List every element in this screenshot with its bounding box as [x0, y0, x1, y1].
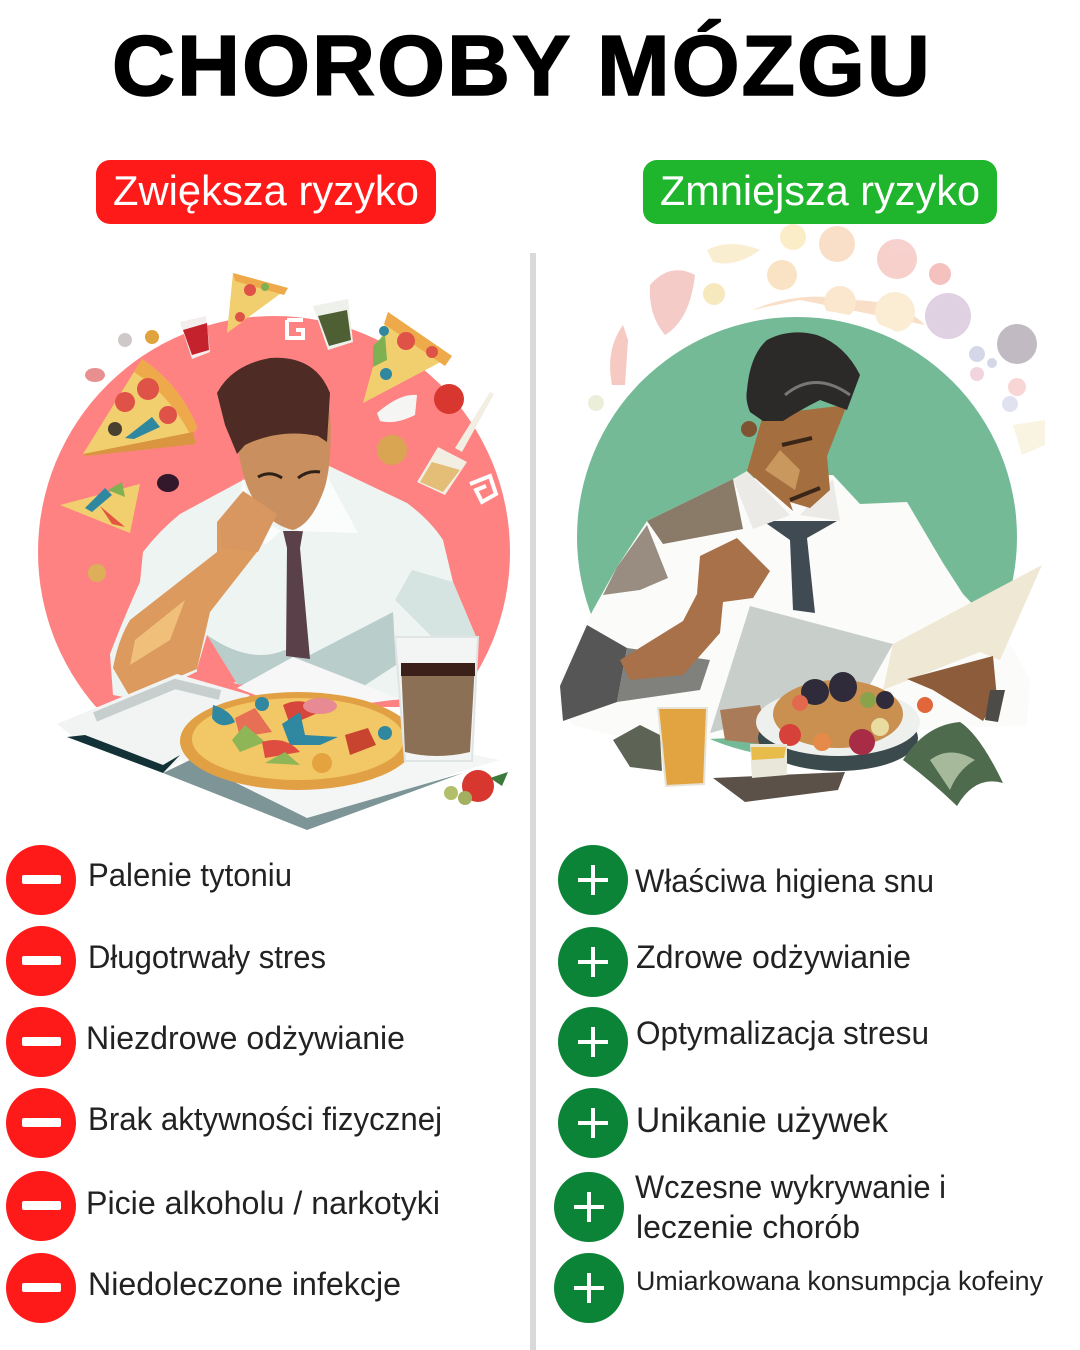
salad bowl — [756, 672, 933, 771]
tomatoes — [444, 770, 508, 805]
risk item: alcohol and drugs — [6, 1171, 440, 1241]
head — [234, 410, 331, 530]
protective item: early detection: Wczesne wykrywanie i — [635, 1169, 946, 1205]
glass of juice — [658, 708, 707, 786]
back paper — [237, 657, 400, 712]
collar — [240, 468, 358, 545]
floating pizza slices — [60, 273, 452, 533]
open book — [57, 674, 250, 773]
tie — [283, 531, 310, 659]
risk list — [6, 845, 442, 1323]
collar — [733, 471, 840, 529]
drinks and snacks — [85, 299, 496, 582]
neck and face — [747, 405, 847, 511]
book right page — [883, 565, 1042, 690]
risk item: no physical activity: Brak aktywności fizycznej — [88, 1101, 442, 1137]
protective item: moderate caffeine — [554, 1253, 1043, 1323]
protective item: sleep hygiene: Właściwa higiena snu — [635, 863, 934, 899]
leaves — [903, 722, 1003, 806]
protective item: avoiding stimulants — [558, 1088, 888, 1158]
glass of cola — [395, 637, 478, 761]
protective item: stress optimisation — [558, 1007, 929, 1077]
right hand — [907, 656, 997, 721]
risk item: untreated infections — [6, 1253, 401, 1323]
protective item: stress optimisation: Optymalizacja stresu — [636, 1015, 929, 1051]
risk item: long-term stress: Długotrwały stres — [88, 939, 326, 975]
protective item: healthy diet: Zdrowe odżywianie — [636, 939, 911, 975]
heading: increases risk: Zwiększa ryzyko — [113, 167, 419, 214]
protective item: avoiding stimulants: Unikanie używek — [636, 1101, 888, 1140]
risk item: smoking: Palenie tytoniu — [88, 857, 292, 893]
protective item: sleep hygiene — [558, 845, 934, 915]
small glass and notebook — [713, 744, 845, 802]
torso in shirt — [110, 465, 477, 700]
protective item: early detection — [554, 1169, 946, 1245]
arm and hand — [113, 491, 277, 697]
mug — [613, 725, 662, 771]
protective item: moderate caffeine: Umiarkowana konsumpcja kofeiny — [636, 1266, 1043, 1296]
lower hand — [720, 705, 770, 745]
protective item: early detection: leczenie chorób — [636, 1209, 860, 1245]
protective item: healthy diet — [558, 927, 911, 997]
risk item: untreated infections: Niedoleczone infekcje — [88, 1266, 401, 1302]
tie — [763, 521, 837, 613]
risk item: no physical activity — [6, 1088, 442, 1158]
risk item: unhealthy diet: Niezdrowe odżywianie — [86, 1020, 405, 1056]
protective list — [554, 845, 1043, 1323]
illustration: man reading with healthy food — [560, 224, 1045, 806]
risk item: alcohol and drugs: Picie alkoholu / narkotyki — [86, 1185, 440, 1221]
illustration: man with unhealthy food — [30, 273, 520, 837]
sleeve shadows — [647, 479, 743, 544]
pink gap under arm — [197, 635, 236, 690]
heading: decreases risk — [643, 160, 997, 224]
torso in shirt — [560, 475, 1030, 742]
risk item: long-term stress — [6, 926, 326, 996]
heading: increases risk — [96, 160, 436, 224]
pizza — [180, 692, 416, 790]
table paper — [150, 720, 500, 824]
hand on face — [220, 491, 277, 552]
central divider — [530, 253, 536, 1350]
risk item: smoking — [6, 845, 292, 915]
risk item: unhealthy diet — [6, 1007, 405, 1077]
faint fruits and vegetables — [588, 224, 1045, 455]
hair — [746, 332, 860, 421]
book left page — [710, 606, 893, 733]
heading: decreases risk: Zmniejsza ryzyko — [660, 167, 980, 214]
hair — [217, 358, 330, 454]
wristwatch — [985, 690, 1005, 722]
title: CHOROBY MÓZGU — [112, 19, 932, 114]
forearm and hand — [620, 538, 770, 680]
shirt shadows — [207, 612, 396, 695]
